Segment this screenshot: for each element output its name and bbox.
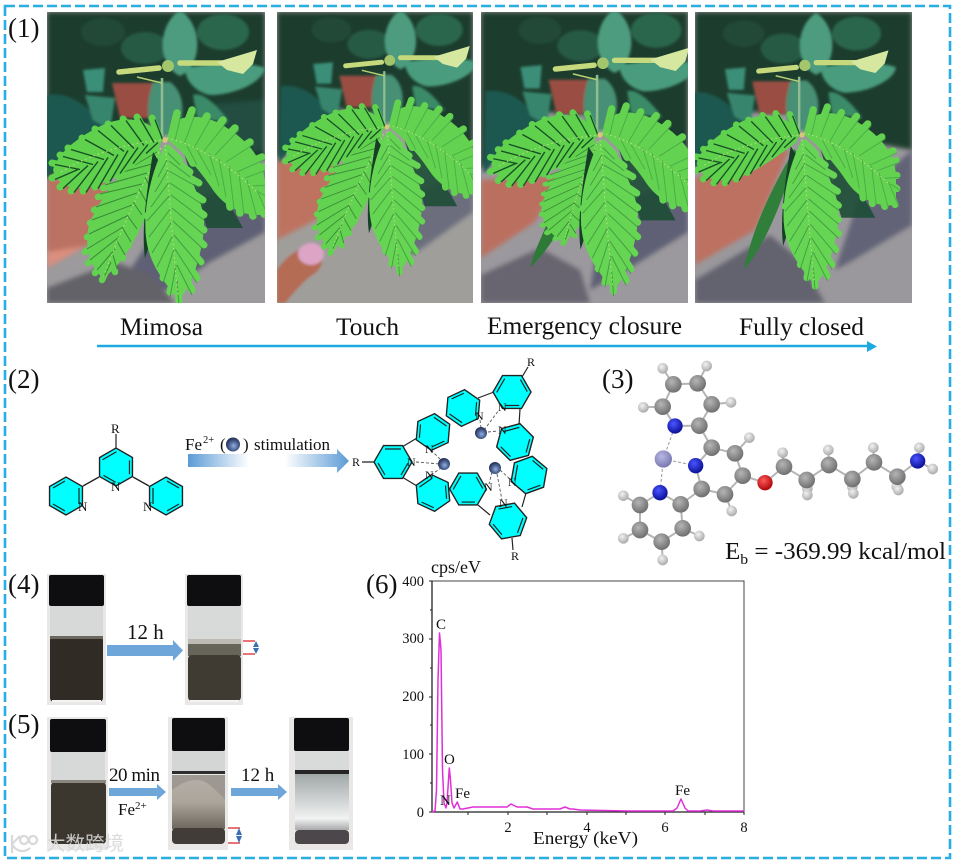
x axis title: Energy (keV)	[533, 828, 638, 849]
y tick labels: 300	[402, 631, 424, 647]
Fe-terpyridine complex: R	[352, 455, 360, 469]
vial 20 min	[168, 717, 228, 850]
photo: emergency closure	[481, 12, 688, 303]
panel (2): terpyridine chelation scheme	[8, 355, 548, 563]
ball-and-stick molecule	[618, 361, 938, 565]
arrow label 12 h: 12 h	[127, 620, 164, 644]
watermark text: 大数跨境	[46, 833, 124, 855]
Fe-terpyridine complex: R	[511, 549, 519, 563]
arrow label 20 min: 20 min	[109, 765, 160, 786]
label (2): (2)	[8, 364, 39, 394]
Fe-terpyridine complex: N	[499, 496, 508, 510]
arrow label: Fe2+ stimulation: 2+	[203, 435, 214, 446]
y tick labels: 100	[402, 747, 424, 763]
y tick labels	[402, 574, 424, 821]
vial after 12 h	[185, 574, 243, 705]
Fe-terpyridine complex: N	[498, 423, 507, 437]
y tick labels: 400	[402, 574, 424, 590]
caption: Touch: Touch	[336, 314, 400, 341]
Fe-terpyridine complex: N	[498, 400, 507, 414]
watermark logo	[12, 835, 37, 853]
plot frame and ticks	[429, 581, 744, 815]
arrow: 12 h	[231, 784, 287, 800]
height bracket	[243, 641, 259, 654]
peak labels	[436, 617, 690, 809]
label (4): (4)	[8, 569, 39, 599]
binding energy: E	[725, 539, 740, 565]
peak labels: C	[436, 617, 446, 633]
arrow label: Fe2+ stimulation: (	[220, 435, 226, 454]
caption: Fully closed: Fully closed	[739, 314, 864, 341]
photo: fully closed	[695, 12, 912, 303]
terpyridine ligand: N	[143, 499, 153, 514]
panel (6): EDS spectrum chart	[366, 557, 748, 849]
caption: Mimosa: Mimosa	[120, 314, 203, 341]
photo: touch	[277, 12, 473, 303]
arrow label: Fe2+ stimulation	[185, 435, 330, 454]
arrow: time sequence	[97, 341, 877, 352]
arrow label Fe2+: 2+	[135, 800, 147, 812]
peak labels: O	[444, 752, 455, 768]
y tick labels: 200	[402, 689, 424, 705]
label (6): (6)	[366, 569, 397, 599]
x tick labels: 4	[583, 820, 591, 836]
y axis title: cps/eV	[431, 557, 481, 577]
x tick labels: 8	[740, 820, 748, 836]
Fe-terpyridine complex: N	[425, 468, 434, 482]
arrow: 20 min Fe2+	[109, 784, 166, 800]
label (5): (5)	[8, 709, 39, 739]
peak labels: Fe	[675, 783, 690, 799]
photo: mimosa	[47, 12, 265, 303]
x tick labels: 6	[661, 820, 669, 836]
panel (1): mimosa closing sequence	[8, 9, 912, 352]
x tick labels: 2	[504, 820, 512, 836]
height bracket	[228, 828, 242, 843]
Fe-terpyridine complex: N	[484, 480, 493, 494]
vial clarified	[289, 717, 353, 850]
terpyridine ligand	[50, 421, 182, 515]
Fe-terpyridine complex: R	[527, 355, 535, 369]
Fe-terpyridine complex	[352, 355, 548, 563]
Fe-terpyridine complex: N	[425, 442, 434, 456]
watermark	[12, 833, 124, 855]
y tick labels: 0	[417, 805, 424, 821]
arrow label Fe2+: Fe	[118, 800, 135, 819]
stimulation arrow	[188, 449, 349, 473]
arrow label 12 h: 12 h	[241, 765, 275, 786]
label (1): (1)	[8, 13, 39, 43]
peak labels: N	[440, 793, 451, 809]
Fe-terpyridine complex: N	[508, 475, 517, 489]
terpyridine ligand: R	[111, 421, 120, 436]
terpyridine ligand: N	[111, 479, 121, 494]
arrow label: Fe2+ stimulation: )	[243, 435, 249, 454]
vial start	[47, 717, 108, 850]
binding energy: = -369.99 kcal/mol	[748, 539, 946, 565]
arrow label: Fe2+ stimulation: stimulation	[254, 435, 330, 454]
binding energy: b	[740, 552, 748, 568]
panel (5): vials with Fe2+	[8, 709, 353, 850]
Fe-terpyridine complex: N	[407, 455, 416, 469]
Fe-terpyridine complex: N	[475, 409, 484, 423]
arrow: 12 h	[107, 640, 183, 661]
panel (3): optimized molecular model	[602, 361, 946, 568]
x tick labels	[504, 820, 748, 836]
arrow label: Fe2+ stimulation: Fe	[185, 435, 202, 454]
icon: Fe ion	[226, 438, 240, 452]
peak labels: Fe	[455, 786, 470, 802]
panel (4): vials without Fe2+	[8, 569, 259, 705]
vial before	[47, 574, 106, 705]
terpyridine ligand: N	[78, 499, 88, 514]
caption: Emergency closure: Emergency closure	[487, 313, 682, 340]
label (3): (3)	[602, 364, 633, 394]
spectrum line	[432, 633, 744, 812]
